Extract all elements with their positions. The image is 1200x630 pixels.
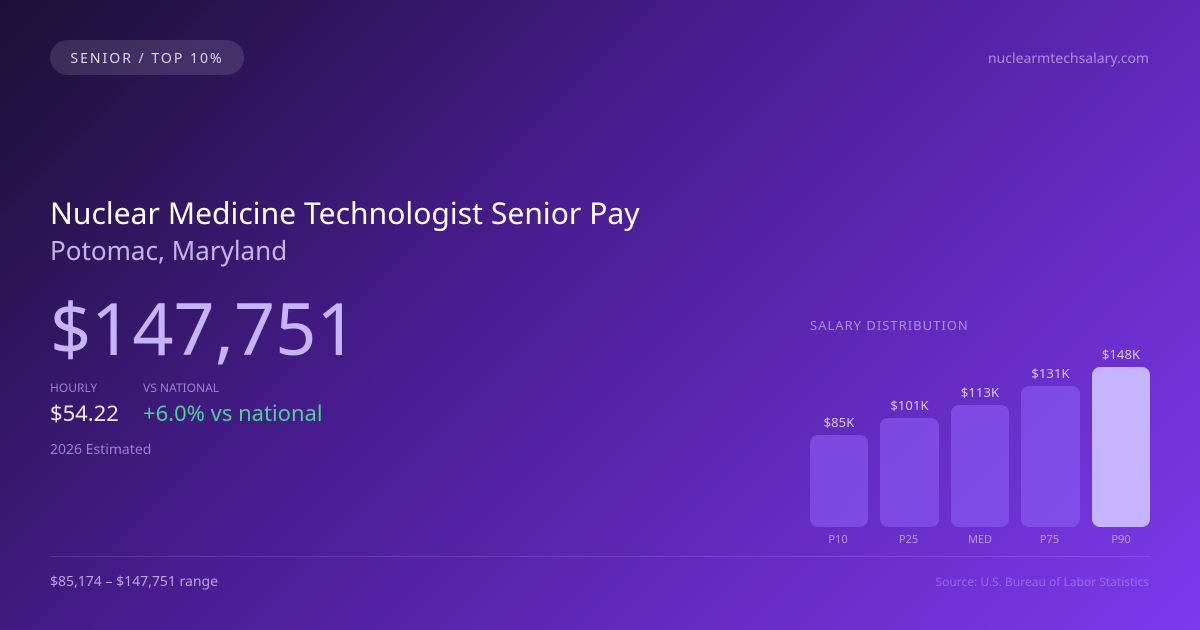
bar P90 bbox=[1092, 345, 1150, 547]
data year note: 2026 Estimated bbox=[50, 440, 151, 459]
salary range: $85,174 – $147,751 range bbox=[50, 572, 218, 591]
bar median: $113K bbox=[961, 383, 999, 401]
bar P10: P10 bbox=[828, 532, 848, 547]
bar P10: $85K bbox=[824, 413, 854, 431]
bar median bbox=[951, 383, 1009, 547]
bar P90: $148K bbox=[1102, 345, 1140, 363]
hourly label: HOURLY bbox=[50, 379, 97, 396]
bar median: MED bbox=[968, 532, 992, 547]
title: Nuclear Medicine Technologist Senior Pay bbox=[50, 192, 640, 233]
stat: vs national bbox=[143, 379, 323, 428]
subtitle: location: Potomac, Maryland bbox=[50, 232, 287, 268]
badge: senior / top 10% bbox=[50, 40, 244, 75]
badge: senior / top 10%: SENIOR / TOP 10% bbox=[70, 49, 224, 68]
vs national label: VS NATIONAL bbox=[143, 379, 219, 396]
bar P25: P25 bbox=[899, 532, 918, 547]
stat: hourly bbox=[50, 379, 119, 428]
hourly value: $54.22 bbox=[50, 398, 119, 428]
bar P75: $131K bbox=[1031, 364, 1070, 382]
site url: nuclearmtechsalary.com bbox=[988, 49, 1149, 68]
bar P25: $101K bbox=[890, 396, 929, 414]
chart heading: SALARY DISTRIBUTION bbox=[810, 316, 969, 334]
headline salary: $147,751 bbox=[50, 279, 358, 377]
chart: salary distribution bbox=[810, 316, 1150, 547]
source: Source: U.S. Bureau of Labor Statistics bbox=[936, 573, 1149, 590]
bar P10 bbox=[810, 413, 868, 547]
bar P75 bbox=[1021, 364, 1080, 547]
bar P75: P75 bbox=[1040, 532, 1059, 547]
vs national value: +6.0% vs national bbox=[143, 398, 323, 428]
bar P90: P90 bbox=[1111, 532, 1131, 547]
bar P25 bbox=[880, 396, 939, 547]
